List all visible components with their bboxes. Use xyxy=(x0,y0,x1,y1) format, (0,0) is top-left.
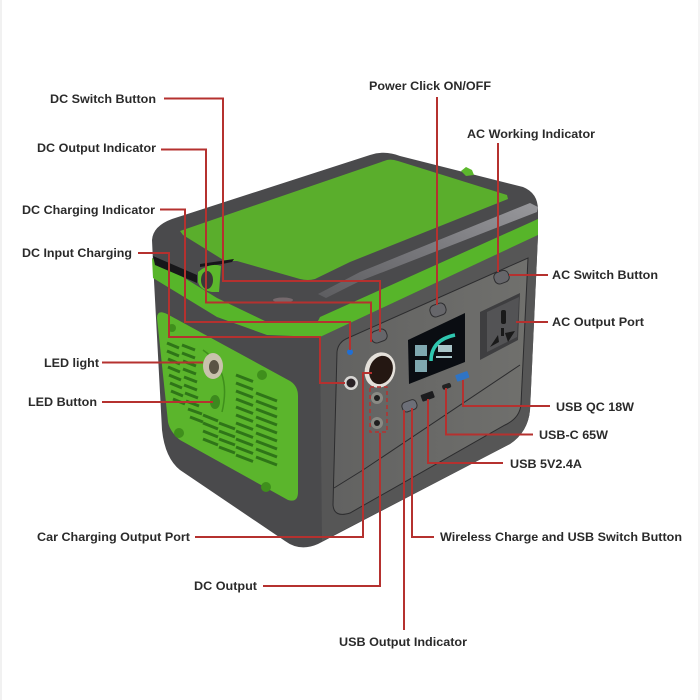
callout: USB-C 65W: USB-C 65W xyxy=(539,428,609,442)
callout: DC Output xyxy=(194,387,387,593)
callout: Wireless Charge and USB Switch Button xyxy=(412,408,682,544)
callout: DC Output: DC Output xyxy=(194,579,257,593)
callout: DC Input Charging xyxy=(22,246,345,383)
green side panel xyxy=(157,312,298,501)
callout: USB 5V2.4A: USB 5V2.4A xyxy=(510,457,582,471)
callout: AC Working Indicator: AC Working Indicator xyxy=(467,127,595,141)
callout: AC Switch Button: AC Switch Button xyxy=(552,268,658,282)
callout: DC Switch Button xyxy=(50,92,380,332)
callout: AC Output Port: AC Output Port xyxy=(552,315,644,329)
display screen xyxy=(408,313,465,384)
callout: USB QC 18W xyxy=(463,380,635,414)
callout: USB-C 65W xyxy=(446,388,609,442)
callout: DC Charging Indicator xyxy=(22,203,350,350)
lid rim highlight strip xyxy=(318,203,538,298)
body silhouette xyxy=(152,153,538,547)
LED button xyxy=(210,395,220,409)
handle knob xyxy=(198,265,221,292)
callout: Power Click ON/OFF: Power Click ON/OFF xyxy=(369,79,491,93)
USB-C port xyxy=(442,382,452,390)
AC output socket xyxy=(480,293,520,360)
callout: DC Output Indicator: DC Output Indicator xyxy=(37,141,156,155)
buttons xyxy=(369,269,511,413)
callout: DC Input Charging: DC Input Charging xyxy=(22,246,132,260)
DC input port xyxy=(344,376,358,390)
front face xyxy=(320,235,538,541)
side vents xyxy=(167,343,277,465)
green band right xyxy=(317,219,538,337)
back latch tab xyxy=(461,167,474,176)
callout: LED Button: LED Button xyxy=(28,395,97,409)
callout: USB QC 18W: USB QC 18W xyxy=(556,400,635,414)
car charging port xyxy=(360,348,400,392)
callout: USB 5V2.4A xyxy=(428,399,582,471)
callout: DC Switch Button: DC Switch Button xyxy=(50,92,156,106)
green lid top xyxy=(180,160,508,280)
handle slot xyxy=(153,256,197,283)
LED light lens xyxy=(203,353,223,379)
front panel xyxy=(333,258,528,514)
handle top notch xyxy=(200,259,234,267)
green band left xyxy=(152,258,320,337)
callout: Car Charging Output Port xyxy=(37,373,372,544)
callout: DC Output Indicator xyxy=(37,141,371,342)
lid corner highlight xyxy=(273,298,293,302)
USB-A port xyxy=(420,391,435,402)
callout: DC Charging Indicator: DC Charging Indicator xyxy=(22,203,155,217)
callout: LED light: LED light xyxy=(44,356,99,370)
DC output ports xyxy=(371,392,383,429)
USB QC port xyxy=(455,371,470,382)
power station device xyxy=(152,153,538,547)
panel screws xyxy=(168,324,271,492)
callout: Car Charging Output Port: Car Charging Output Port xyxy=(37,530,190,544)
callout: Wireless Charge and USB Switch Button: Wireless Charge and USB Switch Button xyxy=(440,530,682,544)
callout: AC Output Port xyxy=(516,315,644,329)
LED housing curve xyxy=(203,350,225,412)
blue indicator xyxy=(347,349,353,355)
front panel divider xyxy=(334,365,520,488)
callout: USB Output Indicator: USB Output Indicator xyxy=(339,635,467,649)
